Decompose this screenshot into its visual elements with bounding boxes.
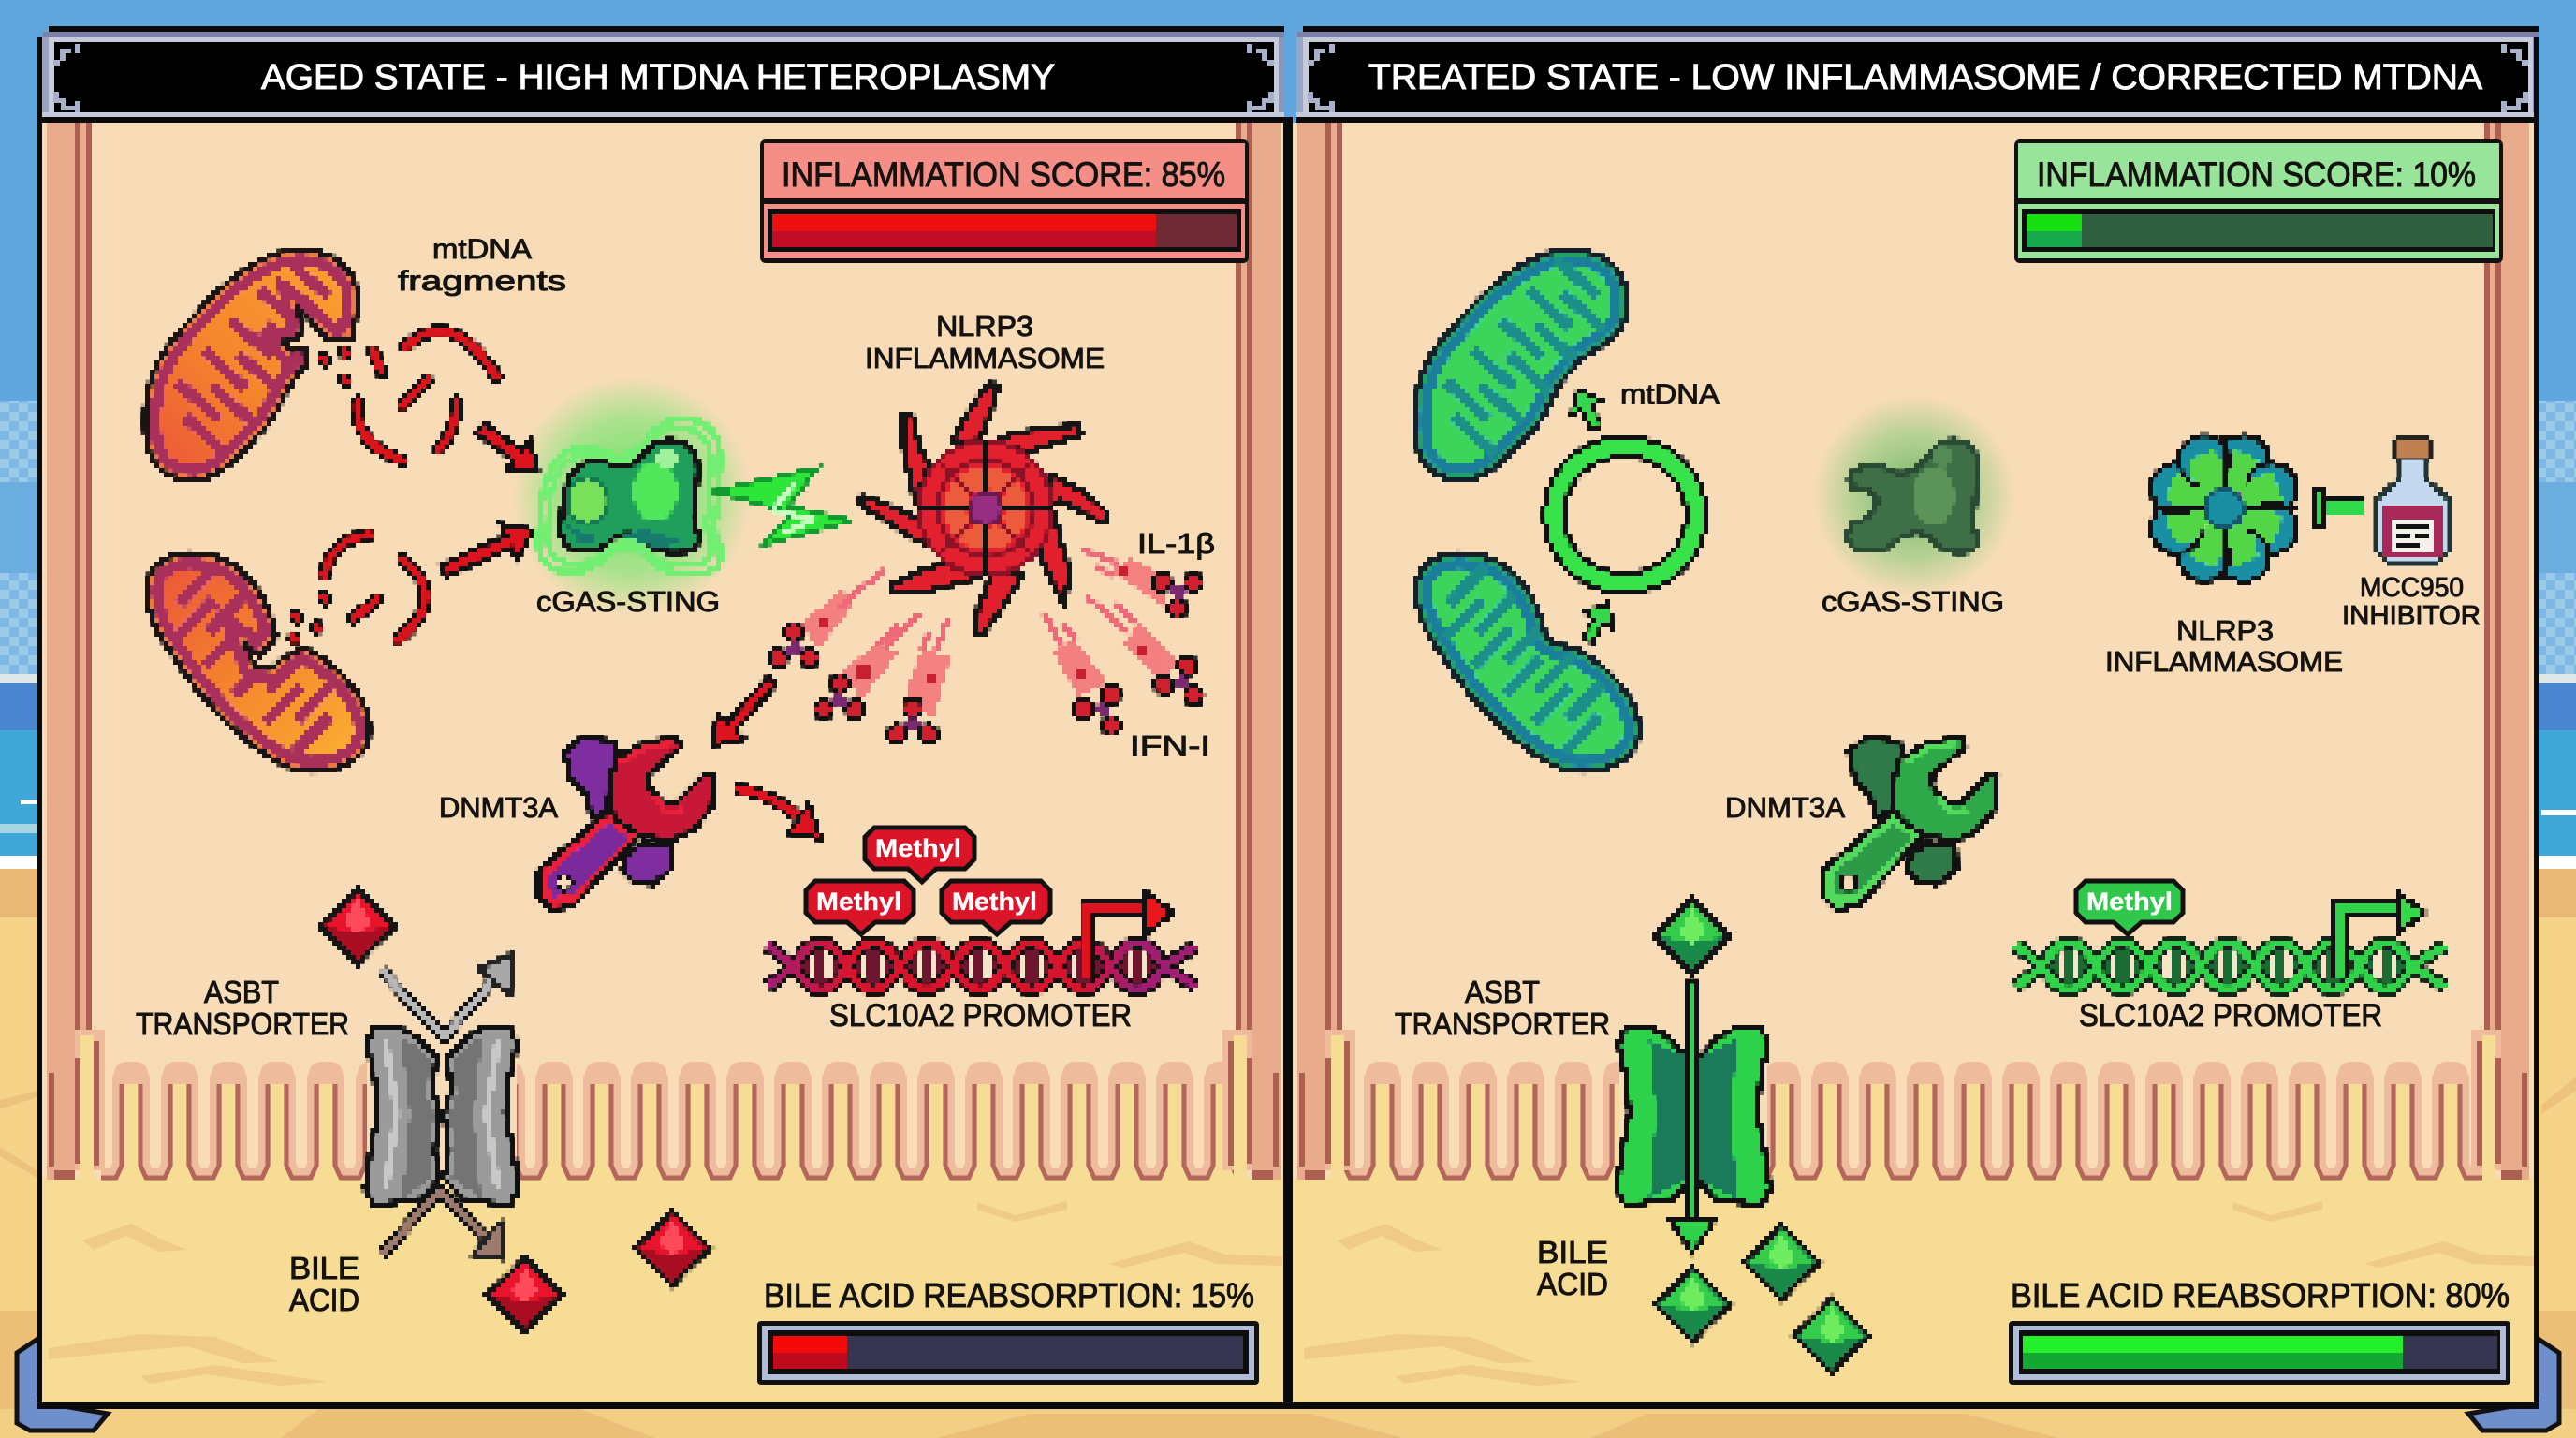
arrow: fragments to cGAS bottom [435,512,541,589]
label: bile acid: ACID [289,1283,359,1317]
icon: healthy mitochondrion top [1414,250,1627,480]
header: aged state: AGED STATE - HIGH MTDNA HETEROPLASMY [261,58,1055,97]
arrow: DNMT3A to promoter [735,788,821,839]
label: IFN-I: IFN-I [1130,729,1210,762]
label: ASBT transporter: TRANSPORTER [136,1006,349,1041]
header: treated state: TREATED STATE - LOW INFLAMMASOME / CORRECTED MTDNA [1368,58,2483,97]
label: mtDNA fragments [398,234,566,297]
label: SLC10A2 promoter: SLC10A2 PROMOTER [2079,998,2382,1034]
icon: hypermethylated DNA [768,943,1196,990]
sprites: treated state [1414,250,2448,1373]
label: MCC950 inhibitor: MCC950 [2360,573,2464,603]
callout: methyl top [865,828,974,882]
arrow: brown efflux [382,1191,505,1259]
score panel: inflammation 10%: INFLAMMATION SCORE: 10% [2037,155,2476,194]
icon: promoter arrow [1088,892,1174,978]
label: MCC950 inhibitor [2342,573,2481,631]
label: MCC950 inhibitor: INHIBITOR [2342,601,2481,631]
panel: aged state [42,26,1284,1405]
label: NLRP3: NLRP3 [936,310,1033,343]
icon: bile acid gem top [320,888,395,963]
icon: healthy mitochondrion bottom [1416,553,1639,771]
callout: methyl left [806,881,914,934]
icon: NLRP3 inflammasome quiet [2144,428,2305,589]
icon: grey ASBT transporter [365,1027,519,1206]
label: bile acid: BILE [1537,1235,1608,1269]
label: NLRP3 [865,310,1105,374]
sprites: aged state [145,250,1215,1332]
icon: DNMT3A wrench quiet [1822,737,1998,910]
label: DNMT3A: DNMT3A [1725,791,1845,824]
corner ornament: bottom left [17,1338,108,1431]
label: ASBT transporter: ASBT [1465,975,1540,1009]
callout: methyl top: Methyl [875,834,961,862]
icon: mtDNA fragments top [323,331,497,461]
label: DNMT3A: DNMT3A [439,791,558,824]
label: ASBT transporter: TRANSPORTER [1395,1006,1610,1041]
icon: mtDNA ring [1554,447,1696,583]
icon: activation lightning [712,468,852,545]
arrow: ring to mitochondrion bottom [1573,594,1623,649]
icon: bile acid gem top [1655,899,1730,974]
label: mtDNA: mtDNA [1620,379,1720,410]
cGAS-STING rings [538,419,721,574]
label: NLRP3: INFLAMMASOME [2105,645,2343,678]
label: bile acid: ACID [1537,1267,1608,1301]
score panel: bile acid reabsorption 15%: BILE ACID REABSORPTION: 15% [764,1276,1254,1314]
icon: damaged mitochondrion bottom [147,553,370,771]
icon: DNMT3A wrench [538,737,713,910]
icon: bile acid gem mid [1744,1225,1819,1299]
corner ornament: bottom right [2468,1338,2559,1431]
icon: mtDNA fragments bottom [294,535,425,640]
icon: bile acid gem right [1794,1299,1869,1373]
icon: cGAS-STING active [561,440,698,552]
label: IL-1 beta: IL-1β [1137,527,1215,560]
icon: cGAS-STING quiet [1848,440,1978,552]
label: NLRP3: INFLAMMASOME [865,342,1105,374]
icon: green ASBT transporter [1617,1027,1770,1206]
label: ASBT transporter [1395,975,1610,1041]
panel background: left [42,123,1284,1405]
arrow: grey blocked uptake [382,953,513,1037]
glow: cGAS-STING quiet [1813,395,2015,597]
header: aged state [42,26,1284,123]
score panel: inflammation 10% [2014,139,2503,263]
label: ASBT transporter [136,975,349,1041]
icon: MCC950 bottle [2378,437,2448,562]
callout: methyl right [942,881,1050,934]
label: bile acid: BILE [289,1251,359,1285]
callout: methyl single: Methyl [2086,888,2173,916]
icon: bile acid gem lower [1655,1267,1730,1342]
icon: bile acid gem right [635,1211,710,1285]
label: cGAS-STING: cGAS-STING [536,585,720,618]
score panel: bile acid reabsorption 80% [2009,1276,2510,1385]
score panel: inflammation 85%: INFLAMMATION SCORE: 85% [782,155,1225,194]
icon: damaged mitochondrion top [145,250,358,480]
label: ASBT transporter: ASBT [204,975,279,1009]
arrow: inflammasome to DNMT3A [700,668,786,757]
header: treated state [1296,26,2539,123]
label: bile acid [289,1251,359,1317]
cytokine trails [800,550,1177,718]
icon: bile acid gem lower [488,1257,563,1332]
label: bile acid [1537,1235,1608,1301]
label: mtDNA fragments: mtDNA [432,234,532,265]
glow: cGAS-STING active [512,376,752,616]
label: NLRP3 [2105,614,2343,678]
arrow: fragments to cGAS top [468,412,549,487]
callout: methyl left: Methyl [816,888,901,916]
arrow: bile acid uptake [1670,983,1715,1253]
score panel: bile acid reabsorption 80%: BILE ACID REABSORPTION: 80% [2011,1276,2510,1314]
icon: cytokines [768,573,1215,743]
arrow: ring to mitochondrion top [1562,382,1611,435]
label: cGAS-STING: cGAS-STING [1822,585,2004,618]
label: SLC10A2 promoter: SLC10A2 PROMOTER [829,998,1132,1034]
callout: methyl right: Methyl [952,888,1037,916]
icon: promoter arrow active [2339,892,2425,978]
callout: methyl single [2076,881,2183,934]
label: NLRP3: NLRP3 [2176,614,2274,647]
score panel: inflammation 85% [760,139,1249,263]
label: mtDNA fragments: fragments [398,266,566,297]
panel background: right [1293,123,2534,1405]
icon: corrected DNA [2016,943,2445,990]
icon: NLRP3 inflammasome [861,384,1107,634]
panel: treated state [1293,26,2539,1405]
icon: inhibition bar [2315,488,2364,526]
score panel: bile acid reabsorption 15% [757,1276,1259,1385]
